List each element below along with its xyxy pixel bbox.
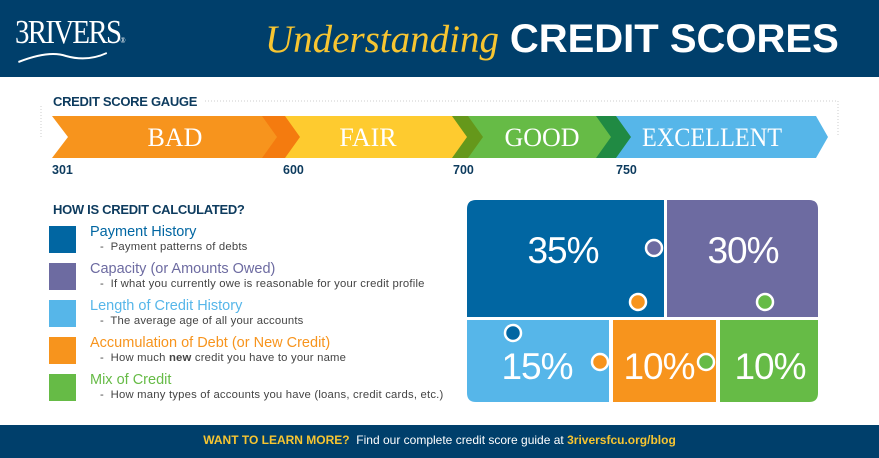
logo: 3RIVERS® bbox=[15, 14, 124, 51]
legend list: - How much new credit you have to your name bbox=[100, 352, 346, 364]
puzzle chart: 15% bbox=[501, 346, 573, 387]
puzzle chart: 10% bbox=[734, 346, 806, 387]
gauge chart: 750 bbox=[616, 163, 637, 177]
gauge chart: FAIR bbox=[339, 123, 397, 152]
legend list: - The average age of all your accounts bbox=[100, 315, 304, 327]
gauge chart: 700 bbox=[453, 163, 474, 177]
puzzle chart: 35% bbox=[527, 230, 599, 271]
legend list bbox=[49, 224, 443, 401]
puzzle chart: 30% bbox=[707, 230, 779, 271]
gauge chart: GOOD bbox=[504, 123, 580, 152]
legend list: Capacity (or Amounts Owed) bbox=[90, 261, 275, 277]
legend list: - How many types of accounts you have (loans, credit cards, etc.) bbox=[100, 389, 443, 401]
header bar bbox=[0, 0, 879, 77]
footer bar: WANT TO LEARN MORE? Find our complete credit score guide at 3riversfcu.org/blog bbox=[203, 433, 676, 447]
gauge chart: EXCELLENT bbox=[642, 123, 782, 152]
gauge chart: 301 bbox=[52, 163, 73, 177]
legend list: Payment History bbox=[90, 224, 196, 240]
legend list: Length of Credit History bbox=[90, 298, 242, 314]
gauge chart bbox=[40, 100, 838, 177]
footer bar bbox=[0, 425, 879, 458]
legend list: - If what you currently owe is reasonable for your credit profile bbox=[100, 278, 425, 290]
heading: gauge: CREDIT SCORE GAUGE bbox=[53, 94, 197, 109]
gauge chart: BAD bbox=[148, 123, 202, 152]
legend list: Mix of Credit bbox=[90, 372, 171, 388]
legend list: Accumulation of Debt (or New Credit) bbox=[90, 335, 330, 351]
title: Understanding CREDIT SCORES bbox=[265, 17, 839, 61]
gauge chart: 600 bbox=[283, 163, 304, 177]
puzzle chart: 10% bbox=[623, 346, 695, 387]
legend list: - Payment patterns of debts bbox=[100, 241, 248, 253]
heading: calculation: HOW IS CREDIT CALCULATED? bbox=[53, 202, 245, 217]
